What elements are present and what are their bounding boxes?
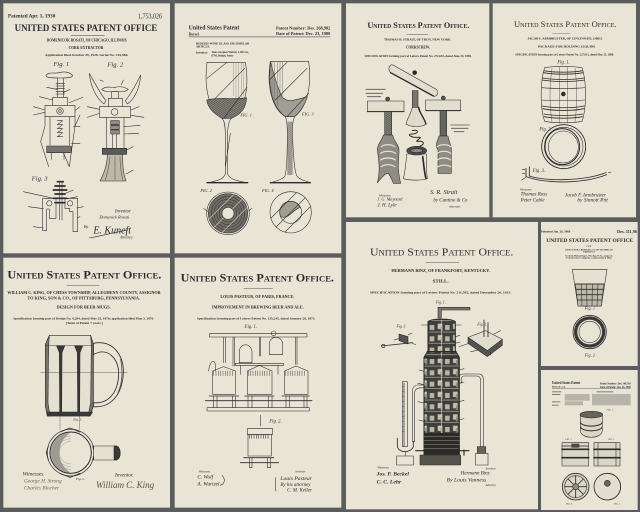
- specification line: Specification forming part of Design No. 9,284, dated May 25, 1876; application filed May 3, 1876.: [13, 316, 154, 320]
- still column: Fig. 1.: [435, 300, 446, 304]
- patent date: Patented Jan. 26, 1960: [541, 230, 571, 234]
- witness signatures: Witnesses: [377, 465, 390, 469]
- inventor signature: [565, 194, 608, 203]
- barrel head ring: [538, 125, 586, 169]
- inventor line: LOUIS PASTEUR, OF PARIS, FRANCE.: [220, 295, 294, 299]
- witness signatures: [377, 194, 403, 209]
- barrel figure: Fig. 1.: [556, 60, 570, 65]
- inventor signature: E. Kuneft: [92, 225, 131, 236]
- term line: [Term of Patent 7 years.]: [66, 321, 103, 325]
- heading rule: [407, 33, 428, 36]
- cup side view: [572, 269, 607, 310]
- panel: cup design patent: [541, 222, 638, 366]
- inventor signature: Attorneys: [448, 204, 461, 208]
- patent number: 1,753,026: [138, 13, 162, 21]
- witness signatures: [196, 470, 224, 487]
- heading: UNITED STATES PATENT OFFICE: [15, 23, 157, 33]
- inventor signature: S. R. Strait: [430, 189, 458, 196]
- left detail figure: [381, 324, 416, 348]
- inventor address: 67700, Bridgen, France: [211, 54, 234, 58]
- figure 3 mechanism detail: Fig. 3: [31, 176, 48, 183]
- figure 2 corkscrew on bottle: [87, 62, 144, 181]
- article title: RIDGED WINE GLASS OR SIMILAR: [196, 41, 250, 45]
- patent date: Date of Patent: Jun. 26, 1990: [600, 386, 631, 389]
- witness signatures: J. G. Maynard: [377, 197, 403, 202]
- inventor line one: WILLIAM C. KING, OF CHESS TOWNSHIP, ALLEGHENY COUNTY, ASSIGNOR: [7, 291, 161, 295]
- mug side view: [41, 335, 127, 429]
- witness signatures: [520, 188, 547, 203]
- heading rule: [67, 284, 99, 286]
- inventor surname: Dorsel: [189, 32, 199, 36]
- invention name: STILL.: [433, 280, 449, 284]
- panel: liquid package patent: [493, 3, 636, 217]
- figure 1 wine glass: FIG. 1: [239, 113, 252, 118]
- inventor block: Inventor:: [196, 50, 208, 54]
- inventor signature: Inventor: [114, 209, 131, 214]
- witness signatures: [376, 465, 409, 485]
- invention name: DESIGN FOR BEER-MUGS.: [57, 306, 111, 310]
- figure 3 wine glass: FIG. 3: [301, 112, 314, 117]
- inventor signature: William C. King: [96, 480, 155, 490]
- keg side view fig 2: FIG. 2: [564, 438, 572, 441]
- figure 2 glass plan view: [199, 188, 252, 235]
- article title second line: ARTICLE: [196, 45, 210, 49]
- cup side view: Fig. 1: [584, 305, 595, 310]
- hoop profile: Fig. 3.: [532, 169, 545, 174]
- inventor signature: [84, 209, 133, 240]
- inventor signature: [430, 189, 468, 208]
- witness signatures: Witnesses: [199, 470, 211, 474]
- inventor signature: C. M. Keller: [287, 488, 312, 493]
- keg side view fig 3: FIG. 3: [607, 438, 615, 441]
- assignor text line two: Federal Glass Company, a corporation of Ohio: [566, 257, 612, 260]
- inventor signature: Jacob F. Armbruster: [565, 194, 606, 199]
- cup plan view: Fig. 2: [584, 353, 596, 358]
- heading rule: [71, 34, 105, 36]
- invention name: PACKAGE FOR HOLDING LIQUIDS.: [538, 45, 596, 49]
- barrel figure: [541, 60, 585, 123]
- figure 3 wine glass: [269, 61, 314, 183]
- specification line: SPECIFICATION forming part of Letters Patent No. 272,633, dated June 23, 1885.: [365, 54, 472, 58]
- inventor line two: TO KING, SON & CO., OF PITTSBURG, PENNSYLVANIA.: [27, 297, 140, 301]
- patent date: Date of Patent: Dec. 23, 1980: [276, 31, 330, 36]
- corkscrew left view: [366, 89, 404, 183]
- inventor signature: By his attorney: [280, 483, 311, 488]
- figure 2 glass plan view: FIG. 2: [199, 188, 213, 193]
- witness signatures: Thomas Ross: [521, 192, 547, 197]
- inventor line: HERMANN BINZ, OF FRANKFORT, KENTUCKY.: [391, 269, 490, 273]
- corkscrew right view: [426, 96, 469, 173]
- header: United States Patent: [552, 381, 581, 385]
- heading: United States Patent Office.: [370, 246, 514, 258]
- mug side view: Fig. 1.: [72, 418, 82, 422]
- inventor line: DOMENICOK ROSATI, OF CHICAGO, ILLINOIS: [47, 38, 127, 42]
- inventor signature: Louis Pasteur: [279, 476, 313, 482]
- inventor line: THOMAS B. STRAIT, OF TROY, NEW YORK.: [384, 38, 451, 42]
- witness signatures: Witnesses.: [23, 471, 45, 477]
- invention name: CORK EXTRACTOR: [69, 46, 104, 50]
- header rule: [189, 36, 330, 38]
- specification line: SPECIFICATION forming part of Letters Patent No. 227,913, dated May 25, 1880.: [515, 53, 614, 57]
- keg top view: FIG. 4: [565, 502, 573, 505]
- inventor signature: By Louis Vanness: [447, 478, 487, 484]
- witness signatures: Witnesses: [379, 194, 391, 198]
- patent number: Patent Number: Des. 268,902: [276, 25, 330, 30]
- witness signatures: Jos. F. Beckel: [376, 471, 409, 477]
- heading: UNITED STATES PATENT OFFICE: [546, 239, 634, 244]
- corkscrew centre view: [389, 65, 438, 180]
- figure 2 corkscrew on bottle: Fig. 2: [106, 62, 124, 69]
- patent number: Des. 111,96: [617, 229, 637, 234]
- still column: [416, 300, 470, 465]
- inventor signature: [447, 466, 497, 487]
- right detail figure: [459, 320, 502, 357]
- heading rule: [553, 32, 570, 35]
- patent detail columns: [552, 391, 631, 406]
- panel: cork extractor patent: [3, 3, 170, 253]
- keg perspective view: FIG. 1: [606, 409, 613, 412]
- figure 1 wine glass: [206, 62, 252, 183]
- specification line: Specification forming part of Letters Patent No. 135,245, dated January 28, 1873.: [197, 317, 315, 321]
- heading: United States Patent Office.: [181, 273, 334, 285]
- left detail figure: Fig. 3.: [396, 324, 406, 328]
- heading: United States Patent Office.: [514, 20, 617, 29]
- invention name: CORKSCREW.: [406, 45, 430, 49]
- keg bottom view: FIG. 5: [613, 502, 621, 505]
- description line: PRODUCT: [583, 251, 595, 254]
- invention name: IMPROVEMENT IN BREWING BEER AND ALE.: [212, 305, 304, 309]
- inventor signature: Inventor.: [114, 473, 134, 479]
- inventor signature: Inventor: [294, 470, 306, 474]
- inventor signature: by Cantino & Co: [433, 198, 468, 203]
- heading: United States Patent Office.: [367, 20, 469, 30]
- panel: beer keg patent: [541, 370, 638, 510]
- witness signatures: Witnesses: [520, 188, 532, 192]
- inventor signature: By: [84, 224, 88, 229]
- patent date: Patented Apr. 1, 1930: [8, 14, 56, 19]
- witness signatures: C. C. Lehr: [377, 479, 402, 485]
- patent number: Patent Number: Des. 308,764: [600, 382, 631, 385]
- witness signatures: A. Wurtzel: [196, 481, 220, 487]
- inventor signature: Hermann Binz: [460, 472, 490, 477]
- witness signatures: Charles Blocher: [24, 485, 60, 491]
- witness signatures: [23, 471, 62, 491]
- specification line: SPECIFICATION forming part of Letters Patent No. 211,592, dated December 26, 1913.: [370, 291, 512, 295]
- hoop profile: [522, 167, 611, 182]
- figure 1 brewing apparatus: [205, 325, 312, 411]
- figure 1 corkscrew: Fig. 1: [52, 61, 69, 68]
- figure 4 glass plan view: FIG. 4: [261, 188, 274, 193]
- figure 3 mechanism detail: [23, 176, 83, 232]
- witness signatures: George H. Strong: [24, 479, 62, 485]
- panel: wine glass patent: [175, 3, 341, 253]
- header rule: [552, 388, 631, 390]
- heading rule: [426, 261, 459, 264]
- panel: corkscrew patent: [346, 3, 489, 217]
- condenser right: [459, 374, 488, 465]
- description: DESIGN FOR A DRINKING GLASS OR SIMILAR: [565, 248, 613, 251]
- figure 1 corkscrew: [33, 61, 83, 167]
- inventor signature: by Sinnott Pitt: [577, 197, 608, 203]
- mug top view: Fig. 2.: [75, 477, 85, 481]
- inventor surname: Mitchell et al.: [552, 386, 566, 389]
- heading: United States Patent Office.: [7, 269, 162, 281]
- right detail figure: Fig. 2.: [476, 322, 487, 326]
- witness signatures: C. Wolf: [197, 474, 215, 481]
- figure 4 glass plan view: [261, 188, 311, 233]
- application line: Application filed October 29, 1928. Serial No. 315,960.: [45, 53, 129, 57]
- assignor text: Frederick Michael Rogers, Wheeling, W. Va., assignor to: [565, 254, 613, 257]
- panel: brewing patent: [175, 258, 341, 508]
- inventor signature: Attorney: [485, 483, 497, 487]
- inventor signature: [275, 470, 313, 493]
- inventor line: JACOB F. ARMBRUSTER, OF CINCINNATI, OHIO.: [527, 37, 603, 41]
- figure 2 tank: [240, 415, 282, 468]
- witness signatures: J. H. Lyle: [377, 204, 397, 209]
- inventor signature: Attorney: [119, 236, 133, 240]
- cup plan view: [573, 315, 606, 358]
- barrel head ring: Fig. 2.: [538, 128, 552, 133]
- panel: still patent: [346, 222, 538, 509]
- inventor name: Jean-Jacques Wetzel, 1,Ob Ln,: [211, 50, 249, 54]
- figure 1 brewing apparatus: Fig. 1.: [244, 325, 257, 330]
- figure 2 tank: Fig. 2.: [268, 420, 282, 425]
- mug top view: [46, 428, 120, 481]
- subject: CUP: [586, 245, 592, 248]
- inventor signature: Inventor: [485, 466, 497, 470]
- heading rule: [244, 287, 273, 290]
- witness signatures: Peter Cable: [520, 198, 545, 203]
- gauges left: [397, 382, 424, 465]
- header: United States Patent: [189, 26, 239, 32]
- panel: beer mug patent: [3, 258, 170, 508]
- inventor signature: [96, 473, 155, 490]
- inventor signature: Domenick Rosati: [98, 215, 130, 220]
